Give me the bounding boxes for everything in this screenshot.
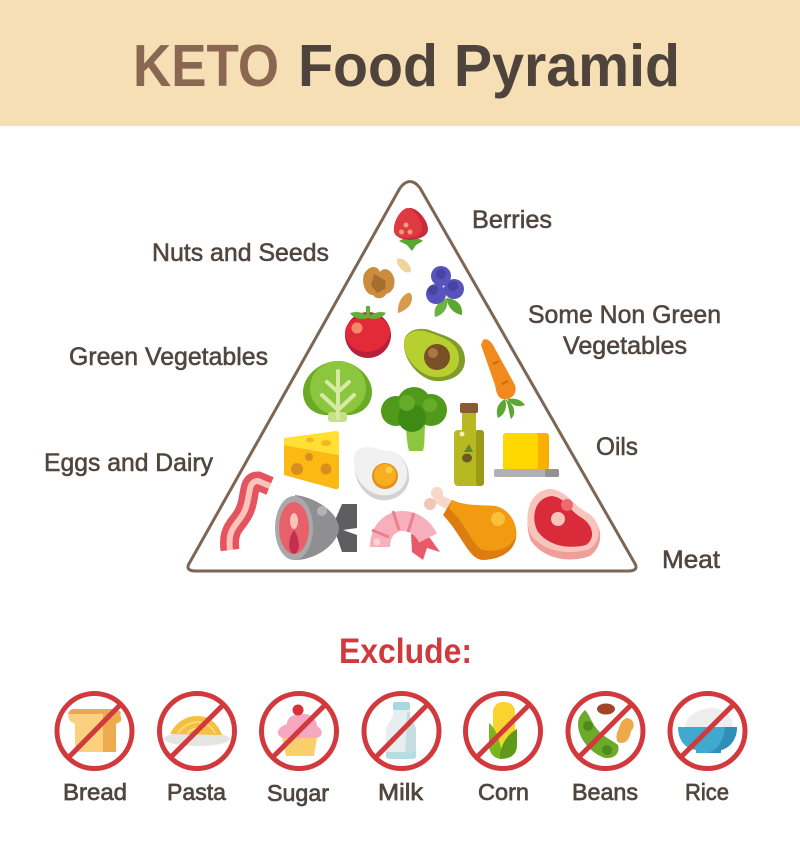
title — [133, 33, 680, 99]
excluded item: pasta — [160, 694, 234, 805]
icon: bacon — [230, 481, 270, 550]
excluded item: corn: Corn — [478, 779, 529, 805]
icon: strawberry — [394, 208, 428, 251]
heading: exclude: Exclude: — [339, 632, 472, 671]
icon: steak — [527, 489, 600, 559]
icon: chicken drumstick — [424, 487, 516, 560]
label: nuts and seeds: Nuts and Seeds — [152, 239, 329, 267]
label: meat: Meat — [662, 546, 720, 574]
title: KETO — [133, 33, 279, 99]
icon: broccoli — [381, 387, 447, 451]
excluded item: milk — [364, 694, 439, 805]
excluded item: bread — [57, 694, 132, 805]
icon: fish — [275, 495, 357, 560]
icon: almond light — [397, 258, 411, 273]
icon: tomato — [345, 306, 391, 358]
icon: avocado — [404, 329, 465, 381]
icon: lettuce — [303, 361, 372, 422]
label: eggs and dairy: Eggs and Dairy — [44, 449, 213, 477]
icon: cheese — [284, 431, 339, 489]
label: some non green vegetables: Some Non Green — [528, 301, 721, 329]
header band — [0, 0, 800, 126]
label: green vegetables: Green Vegetables — [69, 343, 268, 371]
label: some non green vegetables: Vegetables — [563, 332, 687, 360]
excluded item: milk: Milk — [378, 779, 424, 805]
excluded item: corn — [466, 694, 540, 805]
icon: olive oil bottle — [454, 403, 484, 486]
title: Food Pyramid — [298, 33, 680, 99]
excluded item: sugar cupcake: Sugar — [267, 780, 329, 806]
excluded item: bread: Bread — [63, 779, 127, 805]
icon: almond dark — [398, 293, 412, 313]
icon: fried egg — [354, 447, 409, 500]
label: oils: Oils — [596, 433, 638, 461]
icon: shrimp — [372, 511, 440, 560]
excluded item: beans — [568, 694, 643, 805]
label: some non green vegetables — [528, 301, 721, 360]
excluded item: pasta: Pasta — [167, 779, 226, 805]
icon: blueberries — [426, 266, 464, 317]
label: berries: Berries — [472, 206, 552, 234]
pyramid outline — [188, 182, 636, 571]
icon: carrot — [481, 339, 525, 419]
excluded item: rice — [670, 694, 745, 805]
icon: walnut — [363, 267, 395, 298]
excluded item: beans: Beans — [572, 779, 638, 805]
excluded item: rice: Rice — [685, 779, 729, 805]
icon: butter — [494, 433, 559, 477]
excluded item: sugar cupcake — [262, 694, 336, 806]
